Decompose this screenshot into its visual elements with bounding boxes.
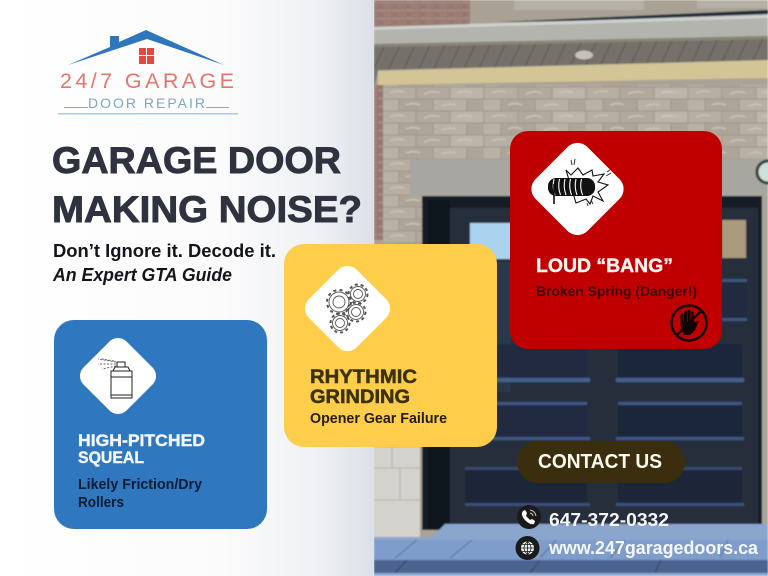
- text: likely friction: Likely Friction/Dry: [78, 477, 202, 493]
- icon: spray can: [75, 333, 161, 419]
- icon: gears: [300, 261, 395, 356]
- panel: high-pitched squeal: [54, 320, 267, 529]
- logo: door repair tagline: DOOR REPAIR: [88, 95, 205, 111]
- contact: phone: 647-372-0332: [549, 510, 669, 530]
- logo: company name: 24/7 GARAGE: [60, 69, 234, 93]
- subtitle: [52, 241, 276, 285]
- text: likely friction: [78, 477, 202, 511]
- logo: roof: [68, 30, 224, 65]
- heading: high-pitched squeal: HIGH-PITCHED: [78, 431, 205, 450]
- logo: [58, 30, 238, 114]
- text: broken spring: Broken Spring (Danger!): [536, 284, 697, 299]
- heading: loud bang: LOUD “BANG”: [536, 256, 673, 277]
- icon: globe: [516, 536, 540, 560]
- title: [52, 140, 362, 230]
- icon: do not touch hand: [672, 306, 706, 340]
- contact: website: www.247garagedoors.ca: [548, 538, 759, 558]
- icon: phone: [517, 505, 541, 529]
- heading: high-pitched squeal: SQUEAL: [78, 448, 144, 467]
- left white gradient panel: [0, 0, 375, 576]
- heading: rhythmic grinding: GRINDING: [310, 387, 410, 408]
- title: MAKING NOISE?: [52, 189, 362, 230]
- text: likely friction: Rollers: [78, 495, 124, 511]
- button: contact us: CONTACT US: [538, 451, 662, 473]
- panel: loud bang: [510, 131, 722, 349]
- photo: house facade with garage door: [374, 0, 768, 576]
- button: contact us: [517, 441, 685, 483]
- contact: phone: [517, 505, 669, 530]
- logo: red window: [139, 48, 154, 64]
- heading: rhythmic grinding: [310, 367, 417, 408]
- panel: rhythmic grinding: [284, 244, 497, 447]
- subtitle: An Expert GTA Guide: [52, 265, 232, 285]
- subtitle: Don’t Ignore it. Decode it.: [53, 241, 276, 261]
- title: GARAGE DOOR: [52, 140, 341, 181]
- icon: broken spring: [526, 137, 629, 241]
- text: opener gear failure: Opener Gear Failure: [310, 411, 447, 427]
- heading: high-pitched squeal: [78, 431, 205, 467]
- logo: underlines: [64, 106, 229, 108]
- heading: rhythmic grinding: RHYTHMIC: [310, 367, 417, 388]
